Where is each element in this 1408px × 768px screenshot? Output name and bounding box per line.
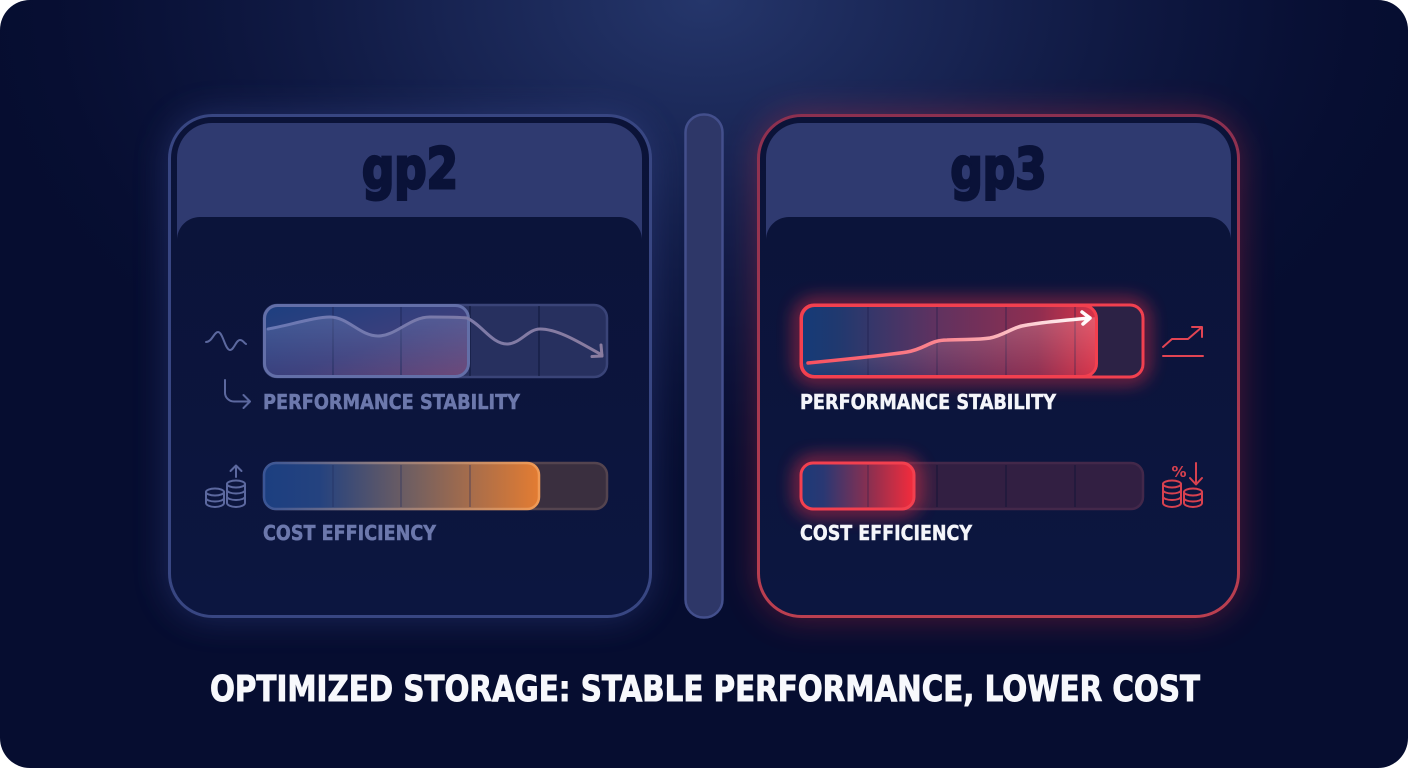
gp2 title: gp2	[362, 137, 458, 202]
gp3 header	[766, 123, 1231, 240]
icon: turn arrow	[225, 380, 250, 408]
gp2 cost efficiency bar	[264, 463, 607, 509]
gp3 performance stability bar	[800, 305, 1143, 378]
panel: gp2	[168, 115, 651, 618]
panel: gp3	[758, 115, 1239, 618]
gp2 cost label: COST EFFICIENCY	[263, 521, 436, 545]
gp3 performance label: PERFORMANCE STABILITY	[800, 390, 1056, 414]
gp2 header	[177, 123, 642, 240]
gp3 cost label: COST EFFICIENCY	[800, 521, 972, 545]
bottom headline: OPTIMIZED STORAGE: STABLE PERFORMANCE, LOWER COST	[210, 669, 1200, 710]
gp2 declining line arrow	[268, 317, 602, 356]
icon: trend up	[1163, 327, 1203, 356]
gp3 cost efficiency bar	[801, 463, 1143, 509]
gp2 performance stability bar	[264, 305, 607, 378]
gp2 performance label: PERFORMANCE STABILITY	[263, 390, 520, 414]
gp3 rising line arrow	[808, 312, 1090, 363]
icon: coins percent down: %	[1171, 463, 1187, 481]
icon: wave	[206, 332, 246, 350]
icon: coins up	[206, 466, 245, 507]
divider column	[686, 114, 722, 618]
gp3 title: gp3	[950, 137, 1046, 202]
icon: coins percent down	[1163, 463, 1202, 507]
